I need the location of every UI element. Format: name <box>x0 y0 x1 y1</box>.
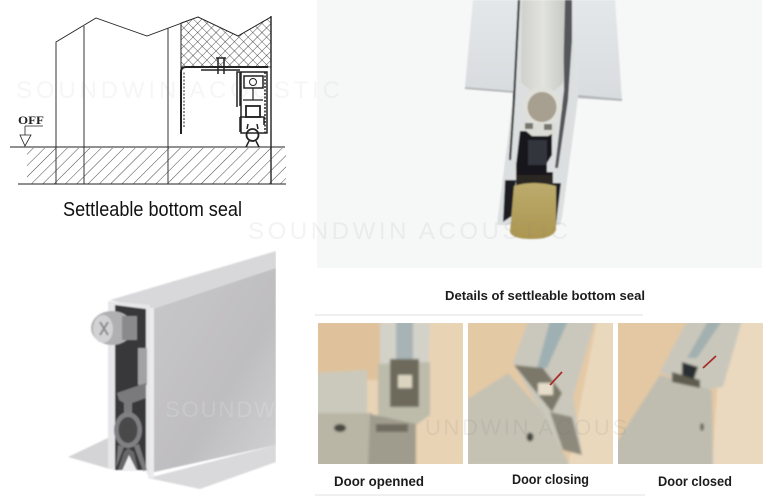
background <box>366 323 463 464</box>
heading: details: Details of settleable bottom seal <box>445 288 645 303</box>
watermarks: SOUNDWIN ACOUSTIC <box>16 77 340 104</box>
panel: door closed <box>616 321 765 466</box>
lower right flange <box>148 445 276 489</box>
front frame <box>108 301 150 478</box>
lower plate <box>550 412 582 455</box>
ground hatching <box>27 148 286 184</box>
label: OFF level <box>18 113 44 146</box>
arrow <box>550 372 562 385</box>
side face <box>150 268 276 473</box>
dark cavity <box>516 131 553 177</box>
watermarks <box>16 77 627 440</box>
watermarks: UNDWIN ACOUS <box>425 415 627 440</box>
watermarks: SOUNDWIN ACOUSTIC <box>248 218 568 245</box>
dark cavity <box>115 305 146 470</box>
photo background <box>317 0 762 268</box>
background <box>618 323 719 450</box>
frame <box>660 321 742 390</box>
top surface <box>110 251 276 310</box>
door outline <box>10 16 286 184</box>
rubber seal <box>114 383 147 471</box>
panel: section diagram <box>10 16 286 221</box>
door leaf <box>616 375 713 466</box>
caption: diagram: Settleable bottom seal <box>63 199 242 221</box>
panel: door closing <box>466 321 615 466</box>
caption: door closed: Door closed <box>658 474 732 489</box>
label: OFF level: OFF <box>18 113 44 127</box>
arrow <box>703 356 716 368</box>
left flange <box>68 438 110 469</box>
caption: door opened: Door openned <box>334 474 424 489</box>
insulation fill <box>181 17 271 67</box>
brass brush <box>510 183 556 239</box>
caption: door closing: Door closing <box>512 472 589 487</box>
flanges <box>465 0 517 92</box>
door leaf <box>466 373 570 466</box>
hinge <box>368 414 416 466</box>
plate <box>672 372 700 388</box>
plate <box>514 365 562 412</box>
panel: door opened <box>316 321 465 466</box>
central channel <box>497 0 578 225</box>
rubber rail <box>521 0 565 92</box>
panel: top right photo <box>317 0 762 268</box>
screw <box>91 311 137 345</box>
panel: bottom left profile photo <box>68 251 276 489</box>
background <box>468 323 598 463</box>
rubber tube <box>561 108 562 110</box>
seal block <box>538 383 553 395</box>
frame <box>513 321 595 455</box>
plate <box>390 359 419 407</box>
watermarks: SOUNDW <box>165 397 275 422</box>
door leaf <box>318 370 368 414</box>
frame <box>380 323 430 364</box>
seal mechanism <box>181 58 268 147</box>
